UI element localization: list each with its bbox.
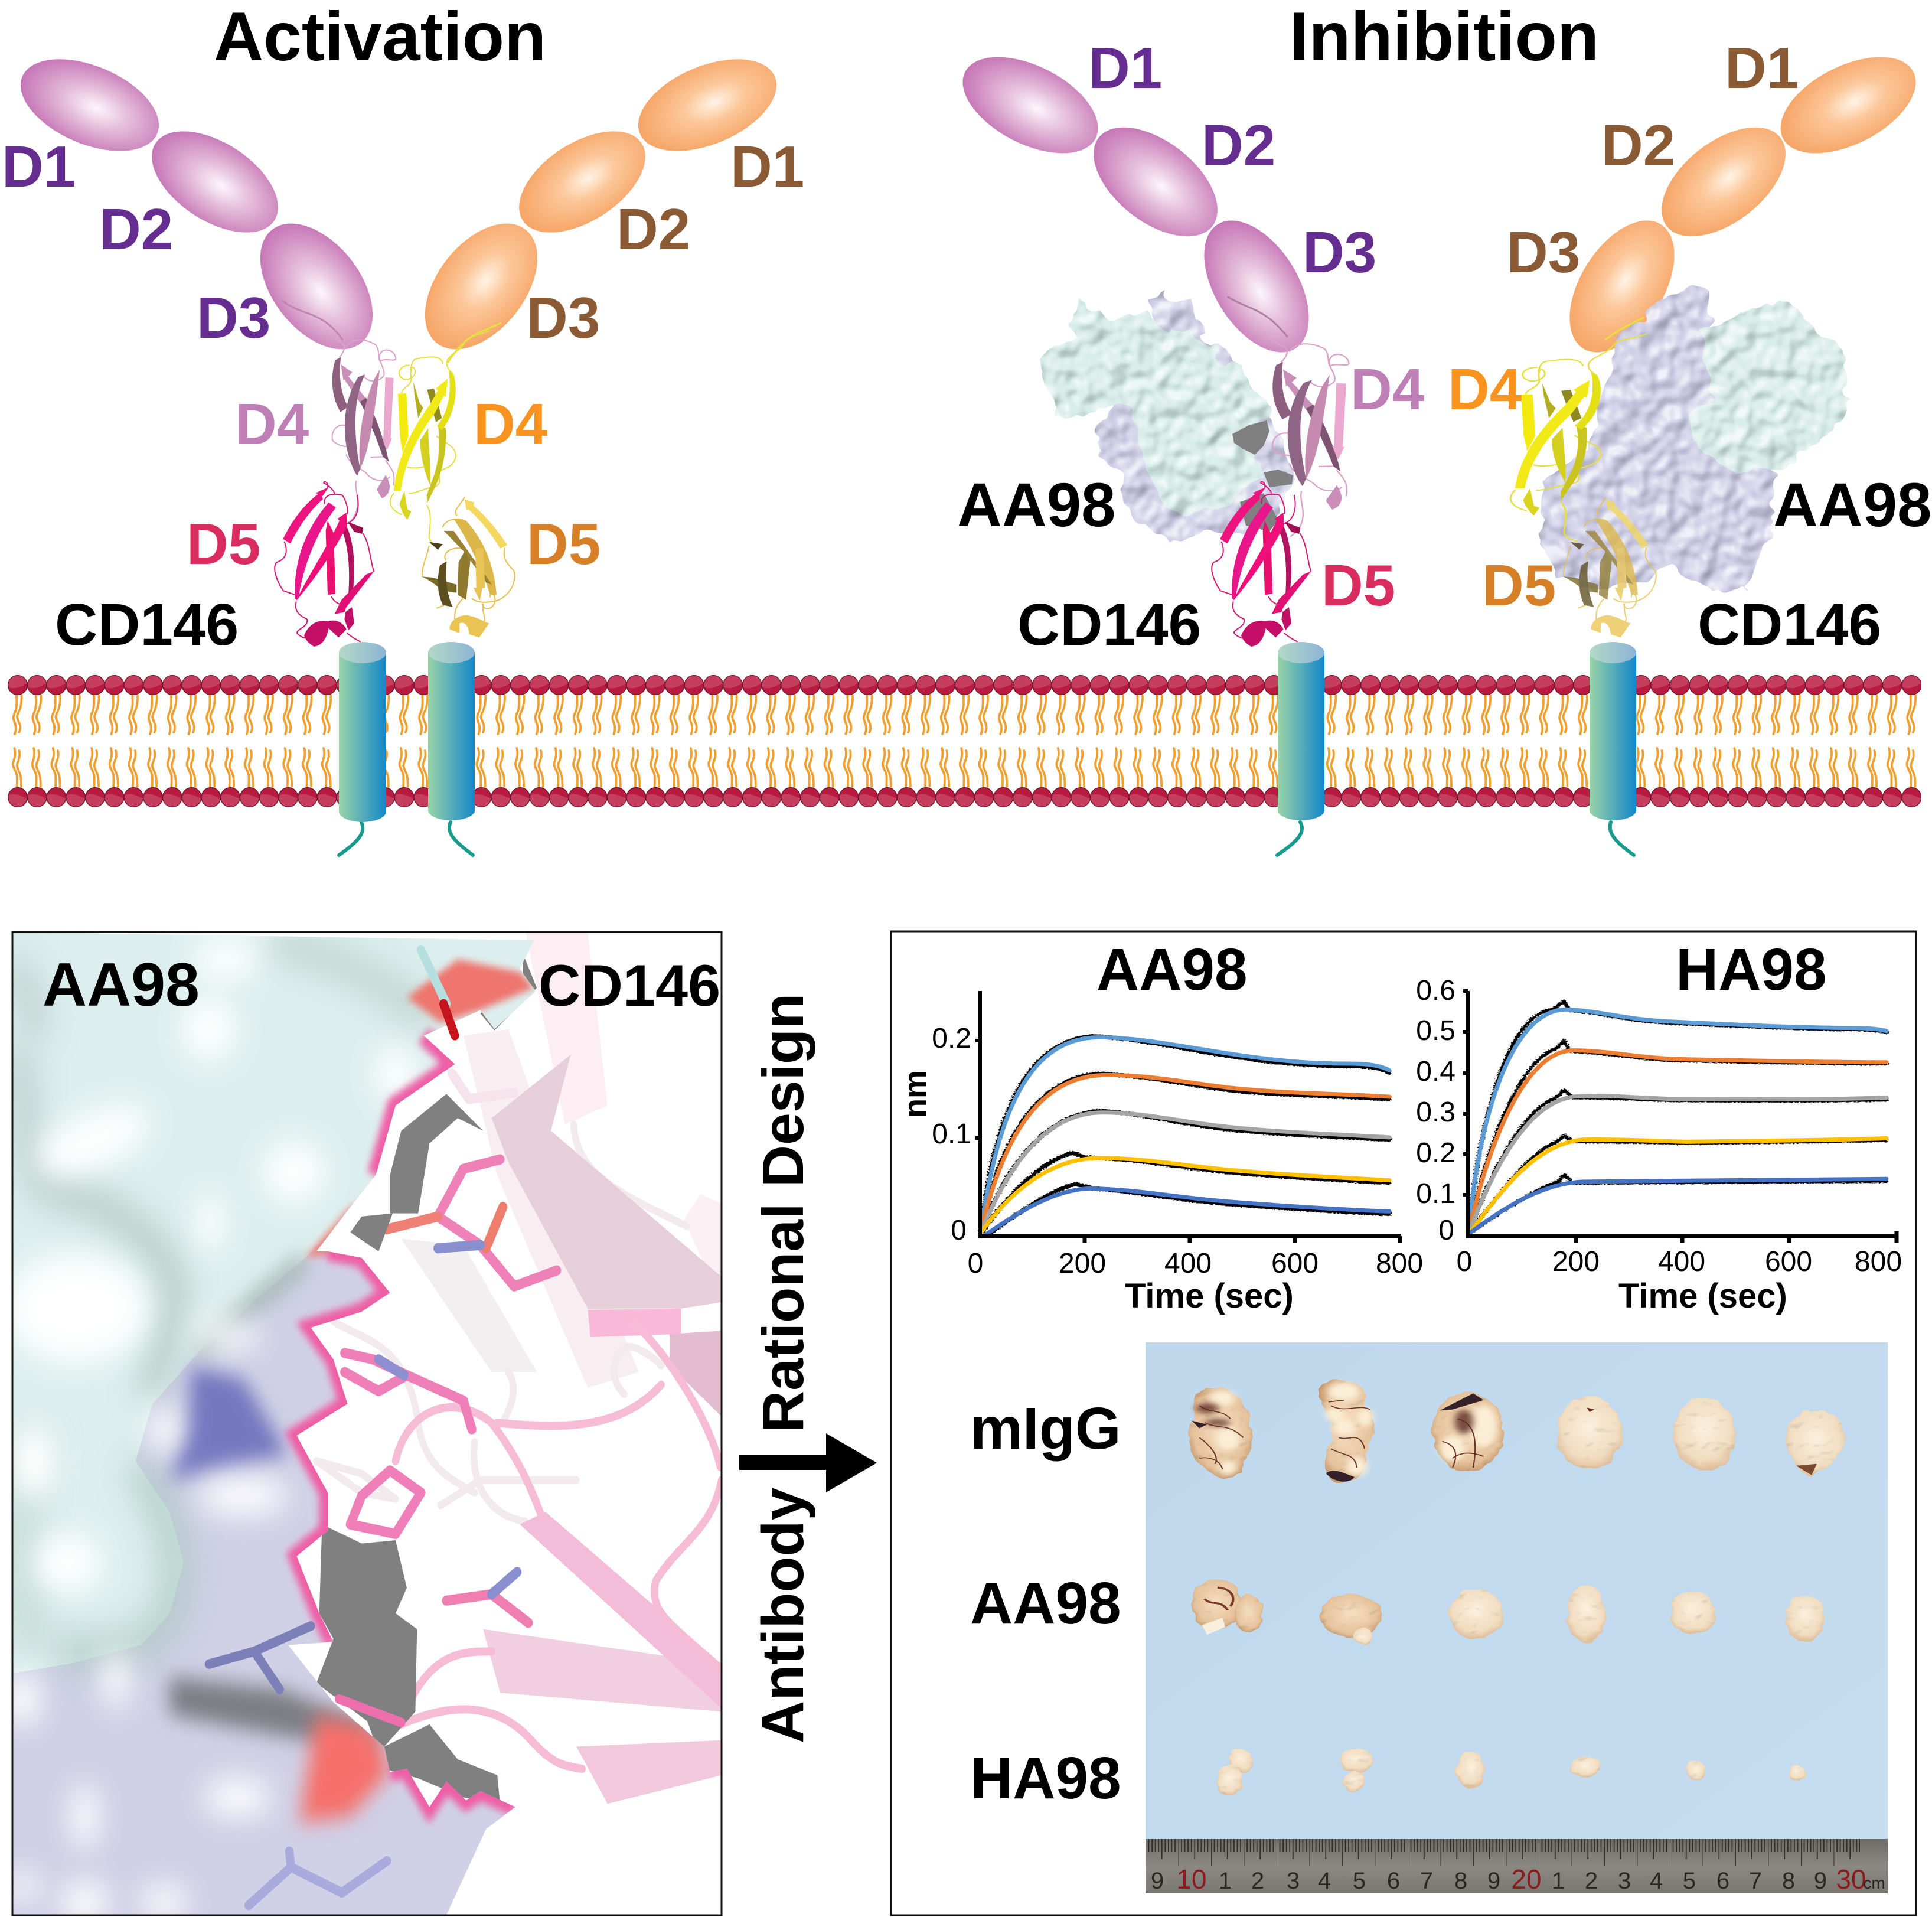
- domain labels: inhibition: D4: [1350, 357, 1424, 422]
- activation: orange CD146 domains D1-D3: [403, 41, 790, 370]
- CD146 labels: CD146: [1017, 592, 1201, 658]
- chart: HA98 binding curves: 0.4: [1416, 1056, 1455, 1087]
- domain labels: inhibition: [1088, 35, 1799, 618]
- chart: AA98 binding curves: 600: [1271, 1248, 1319, 1279]
- inhibition ribbon: D4 pink: [1266, 334, 1349, 536]
- inhibition ribbon: D5 gold: [1562, 497, 1656, 637]
- domain labels: activation: D1: [2, 134, 76, 199]
- CD146 labels: CD146: [55, 592, 239, 658]
- domain labels: inhibition: D5: [1321, 553, 1395, 618]
- domain labels: activation: D2: [616, 197, 690, 262]
- ruler: 20: [1511, 1864, 1542, 1895]
- chart: HA98 binding curves: 0.6: [1416, 975, 1455, 1006]
- chart title: HA98: HA98: [1676, 937, 1827, 1003]
- chart: AA98 binding curves: 800: [1376, 1248, 1423, 1279]
- vertical caption: Rational Design: Rational Design: [750, 993, 815, 1433]
- domain labels: inhibition: D4: [1448, 357, 1522, 422]
- pale cartoon strands of CD146: [316, 932, 722, 1804]
- ruler: 8: [1782, 1868, 1795, 1894]
- ruler: 7: [1420, 1868, 1433, 1894]
- side-chain sticks of CD146: [345, 1074, 557, 1623]
- ruler: 4: [1318, 1868, 1331, 1894]
- chart: AA98 binding curves: 400: [1164, 1248, 1212, 1279]
- heading: Activation: Activation: [214, 0, 546, 75]
- domain labels: inhibition: D3: [1303, 220, 1376, 285]
- CD146 labels: [55, 592, 1881, 658]
- tumor row labels: mIgG: [970, 1396, 1121, 1462]
- ruler: cm: [1863, 1874, 1885, 1892]
- ruler: 5: [1683, 1868, 1696, 1894]
- chart: AA98 binding curves: 0.1: [932, 1119, 971, 1150]
- chart: AA98 binding curves: 0: [968, 1248, 983, 1279]
- inhibition ribbon: D4 yellow: [1510, 334, 1647, 541]
- ruler: 2: [1251, 1868, 1264, 1894]
- heading: Inhibition: Inhibition: [1290, 0, 1599, 75]
- domain labels: activation: D4: [235, 392, 309, 457]
- ruler: 4: [1650, 1868, 1663, 1894]
- domain labels: inhibition: D2: [1601, 113, 1675, 178]
- ruler: 9: [1487, 1868, 1500, 1894]
- tumors row HA98: [1216, 1749, 1804, 1797]
- antibody molecular surface: mint heavy chain and lavender light chain: [0, 921, 565, 1917]
- ruler: 8: [1454, 1868, 1467, 1894]
- left panel label: CD146: CD146: [539, 953, 720, 1018]
- domain labels: inhibition: D5: [1482, 553, 1556, 618]
- ruler: 6: [1387, 1868, 1400, 1894]
- tumor lobes highlights: [1210, 1383, 1497, 1476]
- AA98 surface bound to right CD146: [1539, 283, 1848, 591]
- tumors row mIgG: [1189, 1380, 1845, 1484]
- ruler: [1146, 1839, 1888, 1895]
- ruler: 6: [1716, 1868, 1729, 1894]
- chart: HA98 binding curves: 800: [1855, 1246, 1902, 1277]
- tumor row labels: [970, 1396, 1121, 1811]
- chart title: AA98: AA98: [1096, 937, 1248, 1003]
- AA98 surface bound to left CD146: [1036, 294, 1293, 542]
- inhibition ribbon: D5 magenta: [1212, 482, 1311, 647]
- panel: interface close-up: [0, 921, 722, 1917]
- tumor vessels and dark patches: [1199, 1400, 1483, 1469]
- chart: AA98 binding curves: 0: [951, 1215, 967, 1246]
- chart: AA98 binding curves: 200: [1059, 1248, 1106, 1279]
- domain labels: activation: D5: [527, 511, 601, 576]
- AA98 labels on inhibition: AA98: [957, 471, 1115, 540]
- chart: HA98 binding curves: 0.5: [1416, 1015, 1455, 1046]
- ruler: 9: [1151, 1868, 1164, 1894]
- ruler: 10: [1176, 1864, 1207, 1895]
- domain labels: activation: D5: [187, 511, 260, 576]
- inhibition: pink CD146 domains D1-D3: [948, 37, 1330, 370]
- chart: HA98 binding curves: 400: [1658, 1246, 1705, 1277]
- pink contact rim: [296, 1036, 515, 1807]
- ruler: 9: [1814, 1868, 1827, 1894]
- domain labels: inhibition: D1: [1088, 35, 1162, 100]
- domain labels: inhibition: D3: [1506, 220, 1580, 285]
- domain labels: activation: D2: [99, 197, 173, 262]
- lipid bilayer membrane: [8, 673, 1921, 810]
- contact patch left: [1232, 420, 1293, 532]
- contact surfaces grey: [316, 953, 537, 1804]
- tumor row labels: HA98: [970, 1745, 1121, 1811]
- CD146 labels: CD146: [1698, 592, 1881, 658]
- domain labels: activation: D4: [474, 392, 547, 457]
- chart: HA98 binding curves: 0.2: [1416, 1137, 1455, 1169]
- chart: HA98 binding curves: [1416, 975, 1902, 1315]
- ruler: 7: [1749, 1868, 1762, 1894]
- ruler: 2: [1585, 1868, 1598, 1894]
- tumors row AA98: [1192, 1580, 1824, 1644]
- panel: binding curves and tumors: [891, 931, 1916, 1915]
- stick residues of AA98: [209, 950, 455, 1905]
- lavender light chain region: [13, 1230, 515, 1915]
- chart: AA98 binding curves: Time (sec): [1125, 1277, 1294, 1315]
- chart: HA98 binding curves: 600: [1765, 1246, 1812, 1277]
- chart: HA98 binding curves: 0: [1457, 1246, 1472, 1277]
- ruler: 5: [1353, 1868, 1366, 1894]
- photo: excised tumors on plate: [1146, 1342, 1888, 1895]
- chart: AA98 binding curves: nm: [898, 1070, 933, 1118]
- chart: AA98 binding curves: [898, 991, 1887, 1315]
- tumor row labels: AA98: [970, 1570, 1121, 1636]
- AA98 labels on inhibition: [957, 471, 1931, 540]
- domain labels: activation: D3: [526, 285, 600, 350]
- domain labels: inhibition: D2: [1202, 113, 1275, 178]
- activation: pink CD146 domains D1-D3: [7, 41, 395, 370]
- chart: HA98 binding curves: 0.3: [1416, 1097, 1455, 1128]
- ruler: 3: [1287, 1868, 1300, 1894]
- domain labels: inhibition: D1: [1725, 35, 1799, 100]
- domain labels: activation: D1: [730, 134, 804, 199]
- panel border left: [12, 932, 722, 1915]
- linker tails running over D3 ellipses: [282, 297, 1643, 362]
- domain labels: activation: D3: [197, 285, 270, 350]
- chart: HA98 binding curves: 0.1: [1416, 1178, 1455, 1209]
- AA98 labels on inhibition: AA98: [1773, 471, 1931, 540]
- ruler: 1: [1219, 1868, 1232, 1894]
- vertical caption: Antibody: Antibody: [750, 1487, 816, 1743]
- chart: HA98 binding curves: Time (sec): [1618, 1277, 1787, 1315]
- transmembrane cylinders with cytoplasmic tails: [339, 642, 1636, 855]
- chart: HA98 binding curves: 200: [1552, 1246, 1600, 1277]
- arrow: design to results: [739, 1433, 877, 1492]
- inhibition: orange CD146 domains D1-D3: [1548, 37, 1931, 370]
- chart: AA98 binding curves: 0.2: [932, 1023, 971, 1054]
- ruler: 1: [1552, 1868, 1565, 1894]
- ruler: 30: [1836, 1864, 1866, 1895]
- chart: HA98 binding curves: 0: [1438, 1215, 1454, 1246]
- left panel label: AA98: AA98: [43, 951, 200, 1019]
- domain labels: activation: [2, 134, 804, 576]
- ruler: 3: [1618, 1868, 1631, 1894]
- activation ribbon domains D4 D5: [275, 331, 515, 647]
